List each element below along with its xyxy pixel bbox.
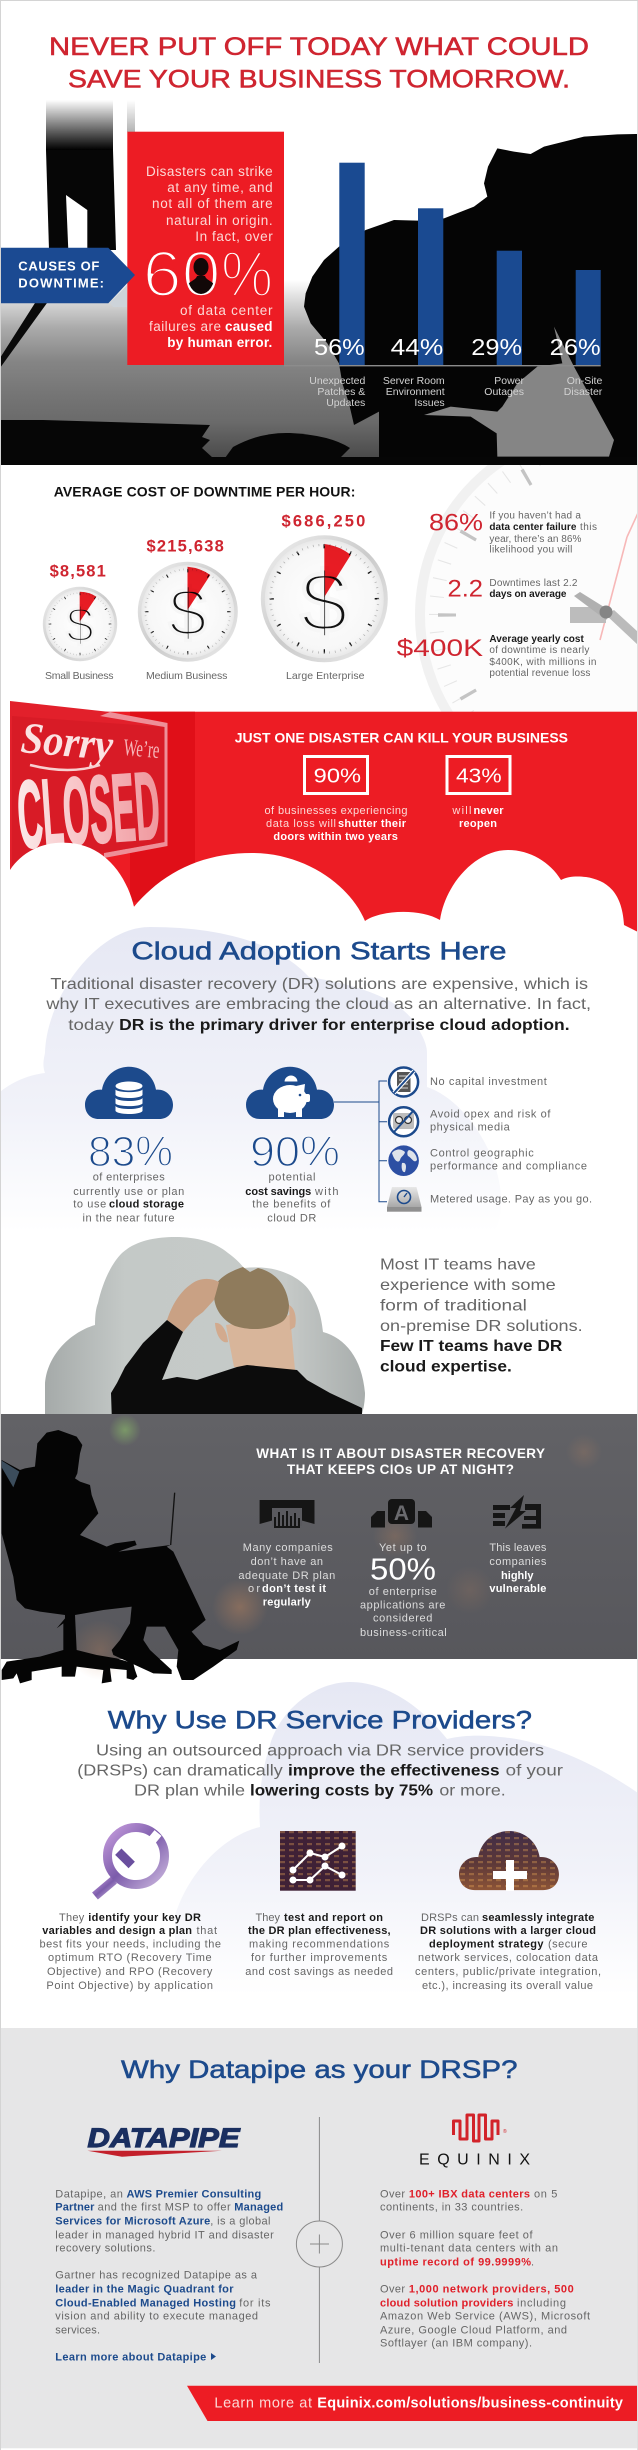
- icon: applications: [371, 1499, 432, 1528]
- stat: 83% cloud storage: to use: [73, 1199, 106, 1211]
- text: most IT teams: [380, 1256, 583, 1376]
- bar chart: Unexpected: [309, 375, 365, 387]
- intro text: of your: [506, 1762, 564, 1780]
- callout: red 60% box: failures are: [149, 319, 221, 334]
- stat: 86%: If you haven’t had a: [489, 511, 581, 522]
- stat: 90%: [264, 756, 408, 843]
- logo: Equinix: [419, 2115, 530, 2168]
- heading: Why Use DR Service Providers?: [108, 1706, 532, 1734]
- logo: Datapipe: DATAPIPE: [88, 2123, 241, 2153]
- stat: 83% cloud storage: currently use or plan: [73, 1186, 184, 1198]
- background cloud: [0, 927, 501, 1232]
- intro text: lowering costs by 75%: [250, 1782, 433, 1799]
- text: most IT teams: Few IT teams have DR: [380, 1338, 563, 1355]
- panel: just one disaster: CLOSED: [14, 752, 163, 869]
- bar chart: Environment: [386, 386, 445, 398]
- intro text: today: [68, 1017, 114, 1034]
- text: about Datapipe: vision and ability to execute managed: [55, 2311, 258, 2323]
- text: about Datapipe: [55, 2189, 283, 2364]
- text: vulnerable: [489, 1542, 547, 1595]
- connector lines: [334, 1081, 387, 1202]
- text: about Equinix: [380, 2189, 590, 2350]
- heading: Cloud Adoption Starts Here: [131, 937, 506, 965]
- intro text: [77, 1743, 564, 1799]
- text: no capital investment: No capital investment: [430, 1076, 547, 1088]
- panel: why Datapipe: [0, 2028, 638, 2448]
- text: metered: Metered usage. Pay as you go.: [430, 1194, 592, 1206]
- call to action banner: [187, 2386, 638, 2421]
- text: about Datapipe: recovery solutions.: [55, 2243, 155, 2255]
- stat: 2.2 days: Downtimes last 2.2: [489, 578, 578, 589]
- text: identify: They: [59, 1912, 85, 1924]
- stat: 43%: reopen: [459, 818, 497, 830]
- text: no DR plan: don’t test it: [262, 1583, 326, 1595]
- text: test and report: for further improvements: [251, 1952, 388, 1964]
- text: test and report: making recommendations: [249, 1939, 390, 1951]
- heading: WHAT IS IT ABOUT DISASTER RECOVERY: [256, 1446, 545, 1461]
- arrow: causes of downtime: DOWNTIME:: [18, 275, 104, 290]
- stat: 43%: 43%: [456, 764, 502, 787]
- intro text: improve the effectiveness: [288, 1762, 500, 1780]
- text: about Datapipe: Gartner has recognized Datapipe as a: [55, 2270, 258, 2282]
- text: about Datapipe: AWS Premier Consulting: [126, 2189, 261, 2201]
- photo: desk and mouse: [0, 420, 638, 465]
- call to action banner: Learn more at: [214, 2396, 312, 2412]
- stat: 90% cost savings: with: [314, 1186, 338, 1198]
- stat: 86%: year, there’s an 86%: [489, 534, 581, 545]
- text: about Equinix: multi-tenant data centers with an: [380, 2243, 558, 2255]
- icon: magnifier with check: [95, 1828, 164, 1896]
- icon: city cloud plus: [459, 1831, 559, 1891]
- panel: average cost of downtime: [42, 465, 637, 712]
- text: about Equinix: Over: [380, 2284, 405, 2296]
- text: no DR plan: regularly: [263, 1597, 312, 1609]
- band shade: [130, 712, 195, 902]
- text: identify: that: [196, 1925, 217, 1937]
- intro text: (DRSPs) can dramatically: [77, 1762, 283, 1780]
- stat: $400K: of downtime is nearly: [489, 645, 589, 656]
- callout: red 60% box: at any time, and: [167, 180, 273, 195]
- heading: Why Datapipe as your DRSP?: [121, 2056, 518, 2084]
- text: about Datapipe: services.: [55, 2325, 100, 2337]
- text: no DR plan: [238, 1542, 335, 1609]
- stat: 90%: data loss will: [266, 818, 336, 830]
- icon: no capital investment: [389, 1068, 418, 1096]
- title: SAVE YOUR BUSINESS TOMORROW.: [68, 65, 570, 93]
- icon: vulnerable: [493, 1495, 541, 1529]
- text: integrate: centers, public/private integration,: [415, 1966, 601, 1978]
- clouds: [0, 843, 638, 960]
- text: about Datapipe: leader in the Magic Quadrant for: [55, 2284, 234, 2296]
- intro text: why IT executives are embracing the cloud as an alternative. In fact,: [45, 996, 591, 1013]
- text: integrate: network services, colocation data: [418, 1952, 599, 1964]
- callout: red 60% box: natural in origin.: [166, 213, 273, 228]
- text: integrate: seamlessly integrate: [482, 1912, 594, 1924]
- text: integrate: [415, 1912, 601, 1992]
- stat: 90% cost savings: potential: [268, 1172, 316, 1184]
- clock: medium business: Medium Business: [146, 670, 227, 682]
- stat: 2.2 days: 2.2: [448, 576, 483, 603]
- bar chart: Disaster: [564, 386, 603, 398]
- bar chart: Outages: [484, 386, 524, 398]
- stat: 43%: will: [451, 805, 471, 817]
- arrow: causes of downtime: CAUSES OF: [18, 259, 99, 274]
- text: test and report: test and report on: [284, 1912, 383, 1924]
- panel: cloud adoption: [0, 927, 592, 1414]
- arrow: causes of downtime: [0, 248, 135, 303]
- clock: medium business: $: [169, 575, 207, 651]
- icon: report chart: [280, 1831, 356, 1891]
- bar chart: 44%: [391, 334, 443, 360]
- text: about Equinix: on 5: [534, 2189, 557, 2201]
- stat: $400K: $400K, with millions in: [489, 657, 596, 668]
- bar chart: 29%: [471, 334, 522, 360]
- red band: [100, 712, 638, 938]
- text: test and report: and cost savings as needed: [245, 1966, 393, 1978]
- text: opex: Avoid opex and risk of: [430, 1109, 551, 1121]
- sorry we're closed sign: We’re: [122, 735, 161, 764]
- text: vulnerable: highly: [501, 1570, 534, 1582]
- text: test and report: [245, 1912, 393, 1978]
- stat: 50%: business-critical: [360, 1627, 447, 1639]
- text: no DR plan: don’t have an: [251, 1556, 323, 1568]
- text: about Datapipe: for its: [239, 2298, 271, 2310]
- clock: medium business: [138, 538, 238, 682]
- bokeh lights: [70, 1414, 602, 1680]
- photo background: desk: [0, 280, 638, 465]
- intro text: Traditional disaster recovery (DR) solutions are expensive, which is: [50, 976, 588, 993]
- text: about Datapipe: and the first MSP to offer: [98, 2202, 231, 2214]
- panel: why use DR service providers: [40, 1682, 638, 1995]
- sorry we're closed sign: [10, 701, 168, 870]
- text: identify: Point Objective) by application: [46, 1980, 213, 1992]
- icon: person: [188, 258, 214, 294]
- bar chart: Patches &: [317, 386, 365, 398]
- photo background: office pillar: [0, 100, 135, 368]
- stat: 90%: 90%: [314, 764, 361, 787]
- dark background: [0, 1414, 638, 1659]
- callout: red 60% box: of data center: [180, 303, 273, 318]
- stat: 86%: likelihood you will: [489, 545, 572, 556]
- text: about Datapipe: Services for Microsoft Azure: [55, 2216, 210, 2228]
- text: integrate: (secure: [548, 1939, 588, 1951]
- text: about Equinix: Over: [380, 2189, 405, 2201]
- title: NEVER PUT OFF TODAY WHAT COULD: [49, 33, 589, 61]
- stat: 90% cost savings: [245, 1067, 340, 1225]
- stat: 90% cost savings: cost savings: [245, 1186, 311, 1198]
- background cloud: [175, 1682, 638, 1995]
- panel: keeps CIOs up at night: [0, 1414, 638, 1683]
- bar chart: Issues: [414, 397, 445, 409]
- bar chart: Updates: [326, 397, 365, 409]
- text: about Equinix: 100+ IBX data centers: [409, 2189, 530, 2201]
- text: most IT teams: cloud expertise.: [380, 1359, 512, 1376]
- bar chart: [284, 163, 603, 409]
- text: about Equinix: cloud solution providers: [380, 2298, 513, 2310]
- stat: 86%: this: [580, 522, 597, 533]
- stat: 86%: data center failure: [489, 522, 577, 533]
- text: about Equinix: Amazon Web Service (AWS), Microsoft: [380, 2311, 590, 2323]
- stat: 90%: doors within two years: [273, 831, 398, 843]
- clock: small business: $8,581: [50, 563, 106, 581]
- stat: 86%: 86%: [429, 510, 483, 537]
- text: about Datapipe: , is a global: [210, 2216, 270, 2228]
- icon: meter: [387, 1187, 422, 1212]
- silhouette: man on chair with laptop: [2, 1430, 239, 1683]
- text: about Datapipe: Learn more about Datapipe: [55, 2352, 206, 2364]
- text: about Datapipe: leader in managed hybrid IT and disaster: [55, 2230, 274, 2242]
- panel: just one disaster: [0, 701, 638, 960]
- callout: red 60% box: caused: [225, 319, 272, 334]
- stat: 90% cost savings: 90%: [250, 1128, 340, 1176]
- callout: red 60% box: [127, 132, 284, 365]
- bar chart: On-Site: [567, 375, 602, 387]
- panel: causes of downtime: [0, 33, 638, 465]
- callout: red 60% box: not all of them are: [152, 196, 273, 211]
- clock: large enterprise: [261, 513, 388, 682]
- text: about Equinix: Over 6 million square feet of: [380, 2230, 533, 2242]
- heading: JUST ONE DISASTER CAN KILL YOUR BUSINESS: [235, 729, 568, 745]
- intro text: Using an outsourced approach via DR service providers: [96, 1743, 544, 1760]
- stat: 90% cost savings: cloud DR: [267, 1213, 316, 1225]
- intro text: or more.: [439, 1782, 506, 1799]
- icon: globe: [388, 1145, 419, 1176]
- text: about Equinix: uptime record of 99.9999%: [380, 2256, 531, 2268]
- stat: 2.2 days: days on average: [489, 589, 567, 600]
- bar chart: 56%: [314, 334, 365, 360]
- stat: 83% cloud storage: 83%: [88, 1128, 173, 1176]
- stat: $400K: potential revenue loss: [489, 668, 590, 679]
- text: vulnerable: companies: [489, 1556, 547, 1568]
- text: about Equinix: .: [531, 2256, 534, 2268]
- clock: small business: Small Business: [45, 670, 114, 682]
- text: opex: [430, 1109, 551, 1134]
- clock: large enterprise: Large Enterprise: [286, 670, 365, 682]
- clock: large enterprise: $: [301, 556, 348, 650]
- text: about Datapipe: Datapipe, an: [55, 2189, 123, 2201]
- stat: $400K: Average yearly cost: [489, 634, 584, 645]
- text: no DR plan: Many companies: [243, 1542, 333, 1554]
- callout: red 60% box: by human error.: [167, 335, 272, 350]
- bar chart: 26%: [550, 334, 601, 360]
- stat: 83% cloud storage: cloud storage: [109, 1199, 184, 1211]
- callout: red 60% box: Disasters can strike: [146, 164, 273, 179]
- stat: 43%: never: [474, 805, 504, 817]
- stat: 90%: of businesses experiencing: [264, 805, 408, 817]
- text: identify: variables and design a plan: [42, 1925, 192, 1937]
- icon: cloud database: [85, 1067, 173, 1119]
- heading: [256, 1446, 545, 1477]
- text: vulnerable: vulnerable: [489, 1583, 546, 1595]
- text: most IT teams: on-premise DR solutions.: [380, 1318, 583, 1335]
- logo: Equinix: EQUINIX: [419, 2151, 530, 2168]
- clock: small business: $: [66, 599, 94, 653]
- icon: chart: [260, 1500, 314, 1528]
- intro text: DR plan while: [134, 1782, 245, 1799]
- text: about Equinix: 1,000 network providers, 500: [409, 2284, 574, 2296]
- text: about Equinix: continents, in 33 countries.: [380, 2202, 523, 2214]
- heading: THAT KEEPS CIOs UP AT NIGHT?: [287, 1462, 514, 1477]
- icon: no physical media: [389, 1107, 418, 1136]
- grey background: [0, 2028, 638, 2448]
- text: test and report: They: [256, 1912, 280, 1924]
- text: no DR plan: adequate DR plan: [238, 1570, 335, 1582]
- call to action banner: Equinix.com/solutions/business-continuity: [317, 2396, 623, 2412]
- sorry we're closed sign: Sorry: [19, 713, 115, 770]
- text: geographic: [430, 1148, 587, 1173]
- text: geographic: performance and compliance: [430, 1161, 587, 1173]
- text: identify: Objective) and RPO (Recovery: [47, 1966, 213, 1978]
- stat: 83% cloud storage: in the near future: [82, 1213, 174, 1225]
- stat: 90%: shutter their: [338, 818, 407, 830]
- text: about Equinix: Azure, Google Cloud Platform, and: [380, 2325, 567, 2337]
- text: about Datapipe: Partner: [55, 2202, 95, 2214]
- background clock: [415, 465, 637, 712]
- title: [49, 33, 589, 93]
- stat: 50%: applications are: [360, 1600, 445, 1612]
- clock: medium business: $215,638: [146, 538, 224, 556]
- text: vulnerable: This leaves: [489, 1542, 547, 1554]
- text: geographic: Control geographic: [430, 1148, 534, 1160]
- stat: $400K: $400K: [397, 635, 483, 662]
- photo: man scratching head in cloud: [45, 1237, 365, 1414]
- photo silhouette: stressed man: [304, 134, 638, 465]
- text: integrate: deployment strategy: [429, 1939, 544, 1951]
- icon: cloud piggy bank: [246, 1067, 334, 1119]
- stat: 2.2 days: [448, 576, 578, 603]
- text: most IT teams: experience with some: [380, 1277, 556, 1294]
- text: identify: [40, 1912, 221, 1992]
- stat: 43%: [447, 756, 510, 830]
- text: about Equinix: including: [517, 2298, 566, 2310]
- stat: 50%: [360, 1542, 447, 1639]
- intro text: DR is the primary driver for enterprise cloud adoption.: [119, 1017, 570, 1034]
- stat: 50%: 50%: [370, 1552, 436, 1586]
- text: integrate: DRSPs can: [421, 1912, 479, 1924]
- text: identify: optimum RTO (Recovery Time: [48, 1952, 212, 1964]
- text: no DR plan: or: [248, 1583, 260, 1595]
- callout: red 60% box: In fact, over: [195, 229, 273, 244]
- divider with plus: [296, 2117, 342, 2363]
- clock: small business: [43, 563, 117, 682]
- stat: 50%: of enterprise: [369, 1586, 437, 1598]
- text: about Datapipe: Managed: [234, 2202, 283, 2214]
- text: integrate: etc.), increasing its overall value: [422, 1980, 593, 1992]
- text: about Equinix: Softlayer (an IBM company).: [380, 2338, 532, 2350]
- callout: red 60% box: 60: [143, 238, 221, 310]
- intro text: [45, 976, 591, 1034]
- stat: 50%: Yet up to: [379, 1542, 427, 1554]
- text: test and report: the DR plan effectiveness,: [248, 1925, 391, 1937]
- text: most IT teams: form of traditional: [380, 1298, 527, 1315]
- bar chart: Power: [494, 375, 524, 387]
- text: identify: identify your key DR: [88, 1912, 201, 1924]
- bar chart: Server Room: [383, 375, 445, 387]
- text: integrate: DR solutions with a larger cloud: [420, 1925, 596, 1937]
- text: about Datapipe: Cloud-Enabled Managed Hosting: [55, 2298, 236, 2310]
- icon: applications: A: [394, 1502, 409, 1525]
- callout: red 60% box: %: [221, 238, 273, 310]
- text: identify: best fits your needs, including the: [40, 1939, 221, 1951]
- clock: large enterprise: $686,250: [282, 513, 365, 531]
- stat: 83% cloud storage: [73, 1067, 184, 1225]
- logo: Equinix: ®: [503, 2128, 507, 2135]
- heading: AVERAGE COST OF DOWNTIME PER HOUR:: [54, 484, 355, 500]
- stat: 50%: considered: [373, 1613, 432, 1625]
- stat: 90% cost savings: the benefits of: [252, 1199, 331, 1211]
- stat: 83% cloud storage: of enterprises: [93, 1172, 165, 1184]
- stat: 86%: [429, 510, 597, 556]
- stat: $400K: [397, 634, 596, 679]
- text: opex: physical media: [430, 1122, 511, 1134]
- text: most IT teams: Most IT teams have: [380, 1256, 536, 1273]
